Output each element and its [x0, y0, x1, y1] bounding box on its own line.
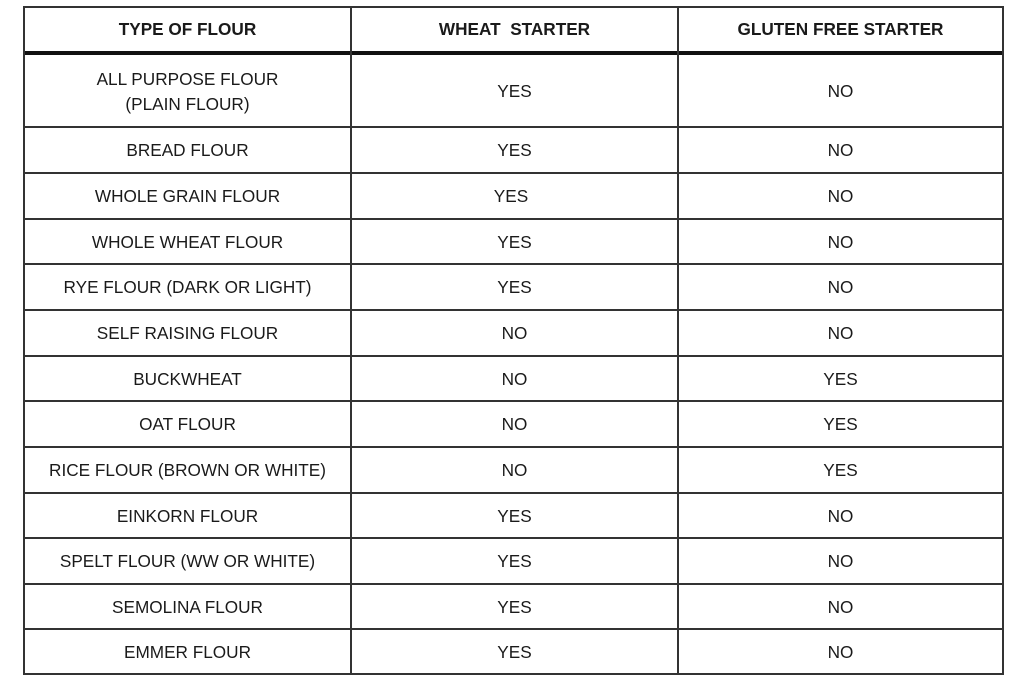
table: flour types vs starter: YES — [497, 277, 532, 297]
table: flour types vs starter: TYPE OF FLOUR — [119, 19, 256, 39]
table: flour types vs starter: NO — [828, 186, 853, 206]
table: flour types vs starter: RICE FLOUR (BROWN OR WHITE) — [49, 460, 326, 480]
table: flour types vs starter: NO — [502, 460, 527, 480]
table: flour types vs starter: NO — [502, 414, 527, 434]
table: flour types vs starter: NO — [502, 323, 527, 343]
table: flour types vs starter: NO — [828, 323, 853, 343]
table: flour types vs starter: YES — [497, 506, 532, 526]
table: flour types vs starter: SELF RAISING FLOUR — [97, 323, 278, 343]
table: flour types vs starter: BUCKWHEAT — [133, 368, 242, 388]
table: flour types vs starter: YES — [494, 186, 528, 206]
table: flour types vs starter: YES — [823, 460, 858, 480]
table: flour types vs starter: NO — [828, 506, 853, 526]
table: flour types vs starter: NO — [828, 596, 853, 616]
table: flour types vs starter: WHOLE GRAIN FLOUR — [95, 186, 280, 206]
table: flour types vs starter: NO — [828, 277, 853, 297]
header row — [118, 19, 943, 39]
table: flour types vs starter: NO — [828, 551, 853, 571]
table: flour types vs starter: RYE FLOUR (DARK OR LIGHT) — [64, 277, 311, 297]
data rows — [49, 68, 858, 662]
table: flour types vs starter: OAT FLOUR — [139, 414, 236, 434]
table: flour types vs starter: NO — [502, 368, 527, 388]
table: flour types vs starter: YES — [823, 414, 858, 434]
table: flour types vs starter: YES — [823, 368, 858, 388]
table: flour types vs starter: EMMER FLOUR — [124, 642, 251, 662]
table: flour types vs starter: NO — [828, 232, 853, 252]
table: flour types vs starter: NO — [828, 81, 853, 101]
table: flour types vs starter: YES — [497, 551, 532, 571]
table: flour types vs starter: YES — [497, 140, 532, 160]
table: flour types vs starter: YES — [497, 642, 532, 662]
table: flour types vs starter: WHEAT STARTER — [439, 19, 590, 39]
table: flour types vs starter: SEMOLINA FLOUR — [112, 596, 263, 616]
table: flour types vs starter: YES — [497, 81, 532, 101]
table: flour types vs starter: WHOLE WHEAT FLOUR — [92, 232, 283, 252]
table: flour types vs starter: SPELT FLOUR (WW OR WHITE) — [60, 551, 315, 571]
table: flour types vs starter: NO — [828, 140, 853, 160]
table: flour types vs starter: ALL PURPOSE FLOUR — [97, 68, 278, 88]
table: flour types vs starter: NO — [828, 642, 853, 662]
table: flour types vs starter: BREAD FLOUR — [126, 140, 249, 160]
table: flour types vs starter: EINKORN FLOUR — [117, 506, 258, 526]
table: flour types vs starter: YES — [497, 232, 532, 252]
table: flour types vs starter: YES — [497, 596, 532, 616]
table: flour types vs starter: (PLAIN FLOUR) — [125, 94, 250, 114]
table: flour types vs starter: GLUTEN FREE STARTER — [738, 19, 943, 39]
